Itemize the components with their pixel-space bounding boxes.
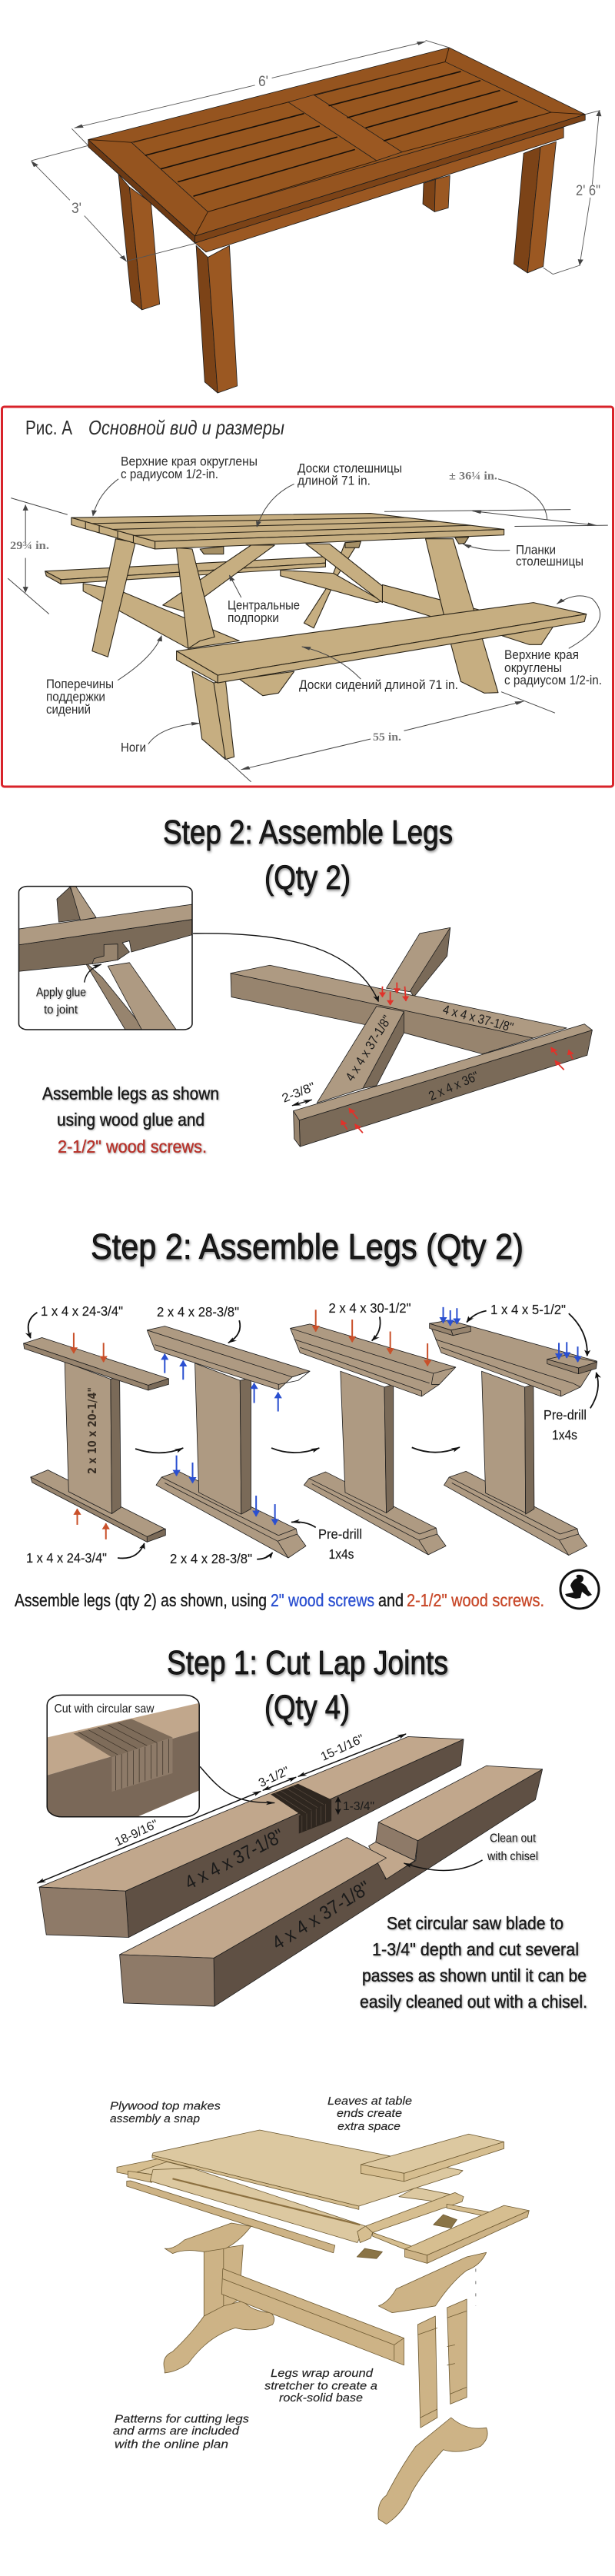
callouts: 55 in. bbox=[373, 731, 401, 744]
instruction text bbox=[15, 1590, 544, 1610]
callouts: округлены bbox=[504, 661, 562, 675]
heading bbox=[167, 1644, 448, 1726]
part labels: Pre-drill bbox=[544, 1407, 587, 1423]
callouts: ± 36¼ in. bbox=[449, 471, 497, 483]
annotations bbox=[110, 2095, 412, 2451]
part labels: 4 x 4 x 37-1/8" bbox=[441, 1002, 515, 1035]
part labels: 4 x 4 x 37-1/8" bbox=[268, 1877, 374, 1954]
inset caption: Cut with circular saw bbox=[54, 1702, 155, 1716]
part labels: 15-1/16" bbox=[319, 1732, 366, 1764]
panel: exploded trestle table bbox=[110, 2095, 529, 2524]
hardware bbox=[357, 2215, 457, 2258]
instruction text: Set circular saw blade to bbox=[387, 1913, 563, 1933]
instruction text: using wood glue and bbox=[57, 1110, 204, 1130]
table leaf bbox=[361, 2134, 504, 2182]
heading: (Qty 2) bbox=[264, 859, 351, 897]
dimension: table height: 2' 6" bbox=[576, 183, 600, 199]
part labels: 2 x 4 x 36" bbox=[427, 1069, 481, 1103]
callouts: Верхние края округлены bbox=[121, 455, 258, 469]
stage 1 bbox=[24, 1337, 168, 1542]
callouts: Ноги bbox=[121, 741, 146, 755]
part labels: 2 x 4 x 28-3/8" bbox=[157, 1304, 239, 1320]
dimension: table length: 6' bbox=[258, 74, 268, 90]
annotations: Leaves at table bbox=[327, 2095, 412, 2108]
annotations: extra space bbox=[337, 2120, 401, 2133]
callouts: Планки bbox=[516, 543, 556, 557]
instruction text: easily cleaned out with a chisel. bbox=[360, 1992, 587, 2012]
annotations: with the online plan bbox=[115, 2438, 228, 2451]
annotations: stretcher to create a bbox=[264, 2379, 377, 2393]
instruction text: and bbox=[378, 1590, 404, 1610]
plywood top bbox=[152, 2130, 463, 2206]
icon: woodworker logo bbox=[560, 1570, 599, 1609]
callouts: Доски сидений длиной 71 in. bbox=[299, 678, 458, 692]
part labels: 4 x 4 x 37-1/8" bbox=[343, 1013, 394, 1083]
drawing: notched beams bbox=[37, 1734, 543, 2006]
part labels: 4 x 4 x 37-1/8" bbox=[181, 1825, 288, 1894]
part labels: 1-3/4" bbox=[343, 1800, 374, 1813]
part labels: 1 x 4 x 24-3/4" bbox=[26, 1550, 107, 1566]
annotations: Plywood top makes bbox=[110, 2099, 221, 2113]
annotations: assembly a snap bbox=[110, 2112, 200, 2125]
pedestal left bbox=[164, 2223, 404, 2373]
inset caption: Apply glue bbox=[36, 986, 86, 1000]
part labels: with chisel bbox=[487, 1850, 538, 1863]
instruction text: Assemble legs as shown bbox=[42, 1083, 219, 1103]
heading: Step 2: Assemble Legs (Qty 2) bbox=[91, 1226, 524, 1266]
instruction text: Assemble legs (qty 2) as shown, using bbox=[15, 1590, 267, 1610]
drawing: exploded table bbox=[117, 2130, 529, 2524]
callouts: 29¾ in. bbox=[10, 540, 49, 552]
callouts: столешницы bbox=[516, 555, 583, 569]
callouts: Поперечины bbox=[46, 677, 114, 691]
instruction text: 1-3/4" depth and cut several bbox=[372, 1939, 579, 1959]
panel: finished brown table with dimensions bbox=[32, 40, 600, 393]
callouts: с радиусом 1/2-in. bbox=[121, 468, 218, 481]
instruction text bbox=[42, 1083, 219, 1157]
panel: step 2 assemble legs, X frame bbox=[18, 814, 592, 1157]
instruction text: 2" wood screws bbox=[271, 1590, 374, 1610]
stage 2 bbox=[147, 1326, 310, 1558]
heading: Step 2: Assemble Legs bbox=[163, 814, 453, 851]
drawing: four assembly stages bbox=[24, 1307, 598, 1559]
part labels: 1x4s bbox=[552, 1427, 577, 1443]
instruction text: 2-1/2" wood screws. bbox=[58, 1137, 207, 1157]
callouts: подпорки bbox=[228, 611, 279, 625]
part labels: 1 x 4 x 24-3/4" bbox=[41, 1303, 123, 1319]
dimension: table width: 3' bbox=[71, 201, 81, 217]
annotations: Patterns for cutting legs bbox=[115, 2413, 250, 2425]
red frame bbox=[2, 407, 613, 787]
drawing: brown table bbox=[32, 40, 600, 393]
heading: (Qty 4) bbox=[264, 1689, 350, 1726]
callouts: длиной 71 in. bbox=[298, 474, 371, 488]
inset: saw kerfs detail bbox=[47, 1695, 274, 1817]
annotations: Legs wrap around bbox=[271, 2367, 374, 2380]
heading bbox=[163, 814, 453, 897]
instruction text: passes as shown until it can be bbox=[362, 1965, 587, 1985]
part labels bbox=[281, 1002, 515, 1106]
callouts: Верхние края bbox=[504, 648, 579, 662]
inset: glue joint detail bbox=[18, 884, 192, 1030]
frame rails bbox=[117, 2158, 529, 2263]
part labels bbox=[26, 1300, 587, 1566]
figure title: Рис. А bbox=[25, 416, 73, 439]
drawing: picnic table bbox=[8, 479, 608, 782]
inset: glue joint detail: to joint bbox=[44, 1003, 78, 1017]
annotations: rock-solid base bbox=[279, 2391, 363, 2405]
callouts: Доски столешницы bbox=[298, 461, 402, 475]
part labels: 1x4s bbox=[329, 1546, 354, 1562]
stage 4 bbox=[430, 1320, 597, 1556]
heading: Step 1: Cut Lap Joints bbox=[167, 1644, 448, 1682]
stage 3 bbox=[291, 1324, 456, 1555]
callouts: Центральные bbox=[228, 598, 300, 612]
callouts: поддержки bbox=[46, 691, 105, 704]
pedestal right bbox=[378, 2252, 487, 2524]
part labels: 1 x 4 x 5-1/2" bbox=[490, 1302, 566, 1317]
panel: picnic table figure with red border bbox=[2, 407, 613, 787]
annotations: and arms are included bbox=[113, 2425, 240, 2438]
part labels: 2 x 10 x 20-1/4" bbox=[85, 1387, 99, 1474]
beam 1 bbox=[39, 1736, 464, 1938]
instruction text: 2-1/2" wood screws. bbox=[407, 1590, 544, 1610]
panel: step 2 assemble legs, I frames bbox=[15, 1226, 599, 1610]
part labels: 2 x 4 x 28-3/8" bbox=[170, 1551, 252, 1566]
figure title: Основной вид и размеры bbox=[88, 416, 284, 439]
figure title bbox=[25, 416, 284, 439]
callouts: с радиусом 1/2-in. bbox=[504, 674, 602, 687]
instruction text bbox=[360, 1913, 587, 2012]
part labels: 2-3/8" bbox=[281, 1080, 317, 1106]
drawing: assembled X legs bbox=[193, 927, 592, 1147]
part labels: 2 x 4 x 30-1/2" bbox=[329, 1300, 411, 1316]
annotations: ends create bbox=[337, 2107, 402, 2120]
part labels: Clean out bbox=[490, 1832, 536, 1845]
part labels bbox=[113, 1732, 538, 1954]
part labels: 18-9/16" bbox=[113, 1818, 160, 1849]
part labels: 3-1/2" bbox=[257, 1765, 291, 1790]
callouts bbox=[10, 455, 602, 755]
beam 2 bbox=[120, 1766, 543, 2006]
panel: step 1 cut lap joints bbox=[37, 1644, 587, 2012]
callouts: сидений bbox=[46, 703, 91, 717]
part labels: Pre-drill bbox=[318, 1526, 362, 1542]
